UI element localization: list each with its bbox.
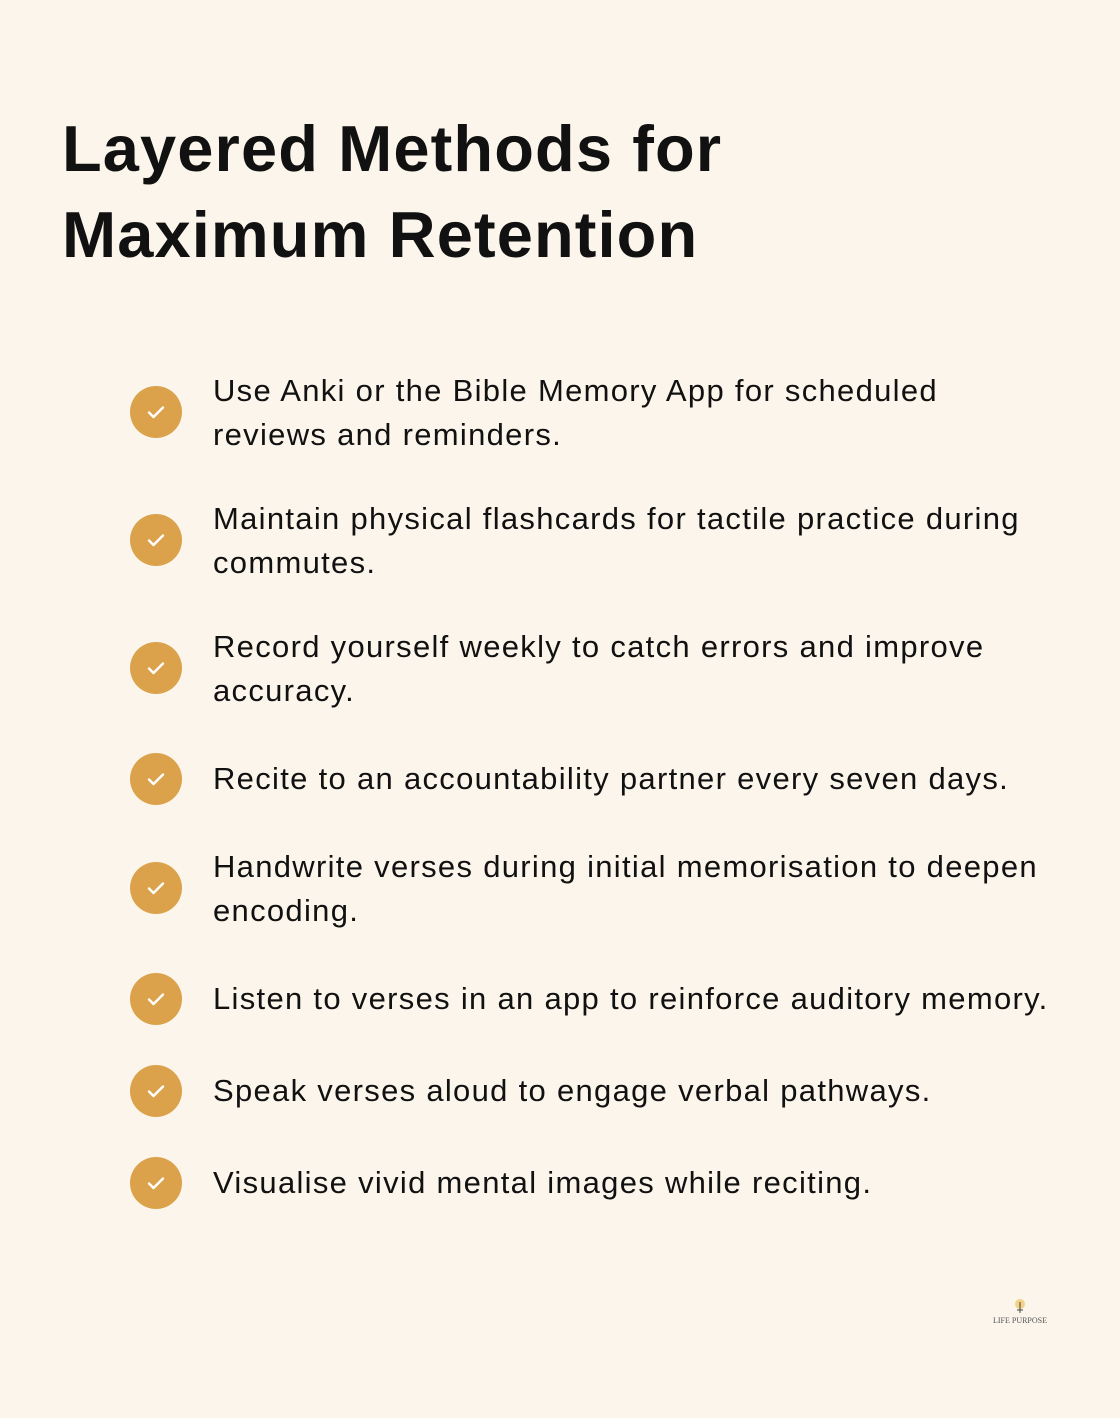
icon: check 7	[130, 1065, 182, 1117]
logo	[993, 1299, 1047, 1325]
text 7: Speak verses aloud to engage verbal pathways.	[213, 1073, 932, 1108]
text 2	[213, 501, 1020, 580]
text 1: reviews and reminders.	[213, 417, 562, 452]
text 3: Record yourself weekly to catch errors and improve	[213, 629, 984, 664]
icon: check 6	[130, 973, 182, 1025]
icon: check 8	[130, 1157, 182, 1209]
text 2: Maintain physical flashcards for tactile practice during	[213, 501, 1020, 536]
text 3	[213, 629, 984, 708]
text 4: Recite to an accountability partner every seven days.	[213, 761, 1009, 796]
icon: check 3	[130, 642, 182, 694]
text 3: accuracy.	[213, 673, 355, 708]
title: Layered Methods for	[62, 112, 722, 185]
item 1	[130, 373, 938, 452]
text 5: encoding.	[213, 893, 359, 928]
item 4	[130, 753, 1009, 805]
icon: check 2	[130, 514, 182, 566]
text 5: Handwrite verses during initial memorisation to deepen	[213, 849, 1038, 884]
text 5	[213, 849, 1038, 928]
item 5	[130, 849, 1038, 928]
text 1	[213, 373, 938, 452]
title: Maximum Retention	[62, 198, 698, 271]
item 6	[130, 973, 1049, 1025]
logo: LIFE PURPOSE	[993, 1316, 1047, 1325]
text 1: Use Anki or the Bible Memory App for scheduled	[213, 373, 938, 408]
icon: check 1	[130, 386, 182, 438]
text 6: Listen to verses in an app to reinforce auditory memory.	[213, 981, 1049, 1016]
icon: check 4	[130, 753, 182, 805]
item 7	[130, 1065, 932, 1117]
text 8: Visualise vivid mental images while reciting.	[213, 1165, 872, 1200]
icon: check 5	[130, 862, 182, 914]
item 8	[130, 1157, 872, 1209]
item 2	[130, 501, 1020, 580]
item 3	[130, 629, 984, 708]
text 2: commutes.	[213, 545, 376, 580]
title	[62, 112, 722, 271]
